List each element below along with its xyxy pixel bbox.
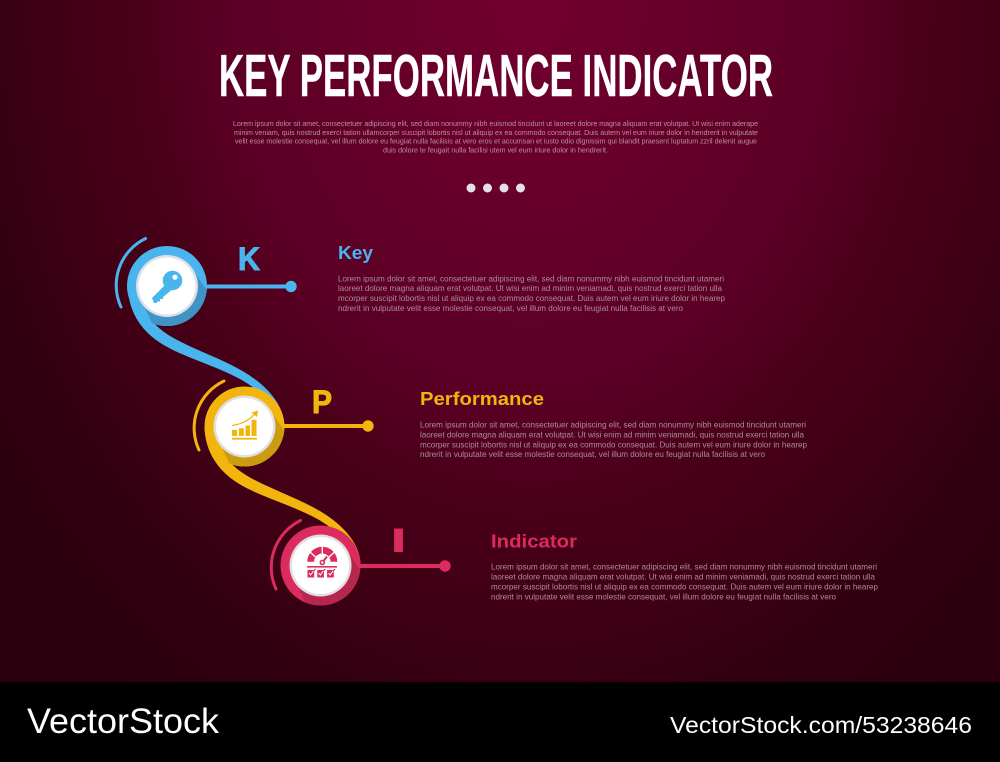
P arc <box>194 381 224 450</box>
text block: Performance: mcorper suscipit lobortis nisl ut aliquip ex ea commodo consequat. Duis autem vel eum iriure dolor in hearep <box>420 440 807 450</box>
K letter: K <box>238 241 260 277</box>
text block: Key: laoreet dolore magna aliquam erat volutpat. Ut wisi enim ad minim veniamadi, quis nostrud exerci tation ulla <box>338 283 722 293</box>
P medallion <box>204 386 284 466</box>
footer url: VectorStock.com/53238646 <box>670 712 972 738</box>
intro text block: Lorem ipsum dolor sit amet, consectetuer adipiscing elit, sed diam nonummy nibh euismod tincidunt ut laoreet dolore magna aliquam erat volutpat. Ut wisi enim aderape <box>233 119 758 128</box>
P letter: P <box>312 384 332 420</box>
step I: indicator <box>270 518 451 606</box>
text block: Performance: ndrerit in vulputate velit esse molestie consequat, vel illum dolore eu feugiat nulla facilisis at vero <box>420 449 765 459</box>
intro text block <box>233 119 758 154</box>
text block: Performance: laoreet dolore magna aliquam erat volutpat. Ut wisi enim ad minim veniamadi, quis nostrud exerci tation ulla <box>420 430 804 440</box>
intro text block: minim veniam, quis nostrud exerci tation ullamcorper suscipit lobortis nisl ut aliquip ex ea commodo consequat. Duis autem vel eum iriure dolor in hendrerit in vulputate <box>234 128 758 137</box>
text block: Indicator: Lorem ipsum dolor sit amet, consectetuer adipiscing elit, sed diam nonummy nibh euismod tincidunt utameri <box>491 562 877 572</box>
ribbon: yellow connector <box>204 426 361 568</box>
text block: Indicator: mcorper suscipit lobortis nisl ut aliquip ex ea commodo consequat. Duis autem vel eum iriure dolor in hearep <box>491 582 878 592</box>
footer logo: VectorStock <box>27 702 220 741</box>
text block: Key: Lorem ipsum dolor sit amet, consectetuer adipiscing elit, sed diam nonummy nibh euismod tincidunt utameri <box>338 273 724 283</box>
four dots divider <box>466 184 525 192</box>
heading: Indicator: Indicator <box>491 532 577 552</box>
heading: Performance: Performance <box>420 389 544 409</box>
step K: key <box>114 236 297 326</box>
icon: gauge with checkboxes <box>307 546 337 578</box>
text block: Indicator: ndrerit in vulputate velit esse molestie consequat, vel illum dolore eu feugiat nulla facilisis at vero <box>491 592 836 602</box>
intro text block: duis dolore te feugait nulla facilisi utem vel eum iriure dolor in hendrerit. <box>383 145 608 154</box>
intro text block: velit esse molestie consequat, vel illum dolore eu feugiat nulla facilisis at vero eros et accumsan et iusto odio dignissim qui blandit praesent luptatum zzril delenit augue <box>235 137 757 146</box>
step P: performance <box>192 380 374 466</box>
I arc <box>271 520 300 589</box>
footer bar <box>0 682 1000 762</box>
I letter: I <box>390 522 407 560</box>
K medallion <box>127 246 207 326</box>
P leader line <box>282 420 374 432</box>
ribbon: blue connector <box>128 286 284 428</box>
text block: Indicator <box>491 532 878 602</box>
text block: Key <box>338 243 725 313</box>
K leader line <box>205 281 297 292</box>
text block: Key: mcorper suscipit lobortis nisl ut aliquip ex ea commodo consequat. Duis autem vel eum iriure dolor in hearep <box>338 293 725 303</box>
text block: Indicator: laoreet dolore magna aliquam erat volutpat. Ut wisi enim ad minim veniamadi, quis nostrud exerci tation ulla <box>491 572 875 582</box>
I leader line <box>358 560 451 572</box>
text block: Performance: Lorem ipsum dolor sit amet, consectetuer adipiscing elit, sed diam nonummy nibh euismod tincidunt utameri <box>420 420 806 430</box>
icon: growth chart <box>232 410 258 440</box>
icon: key <box>152 271 182 303</box>
text block: Performance <box>420 389 807 459</box>
I medallion <box>280 526 360 606</box>
K arc <box>116 238 146 307</box>
heading: Key: Key <box>338 243 373 263</box>
text block: Key: ndrerit in vulputate velit esse molestie consequat, vel illum dolore eu feugiat nulla facilisis at vero <box>338 303 683 313</box>
